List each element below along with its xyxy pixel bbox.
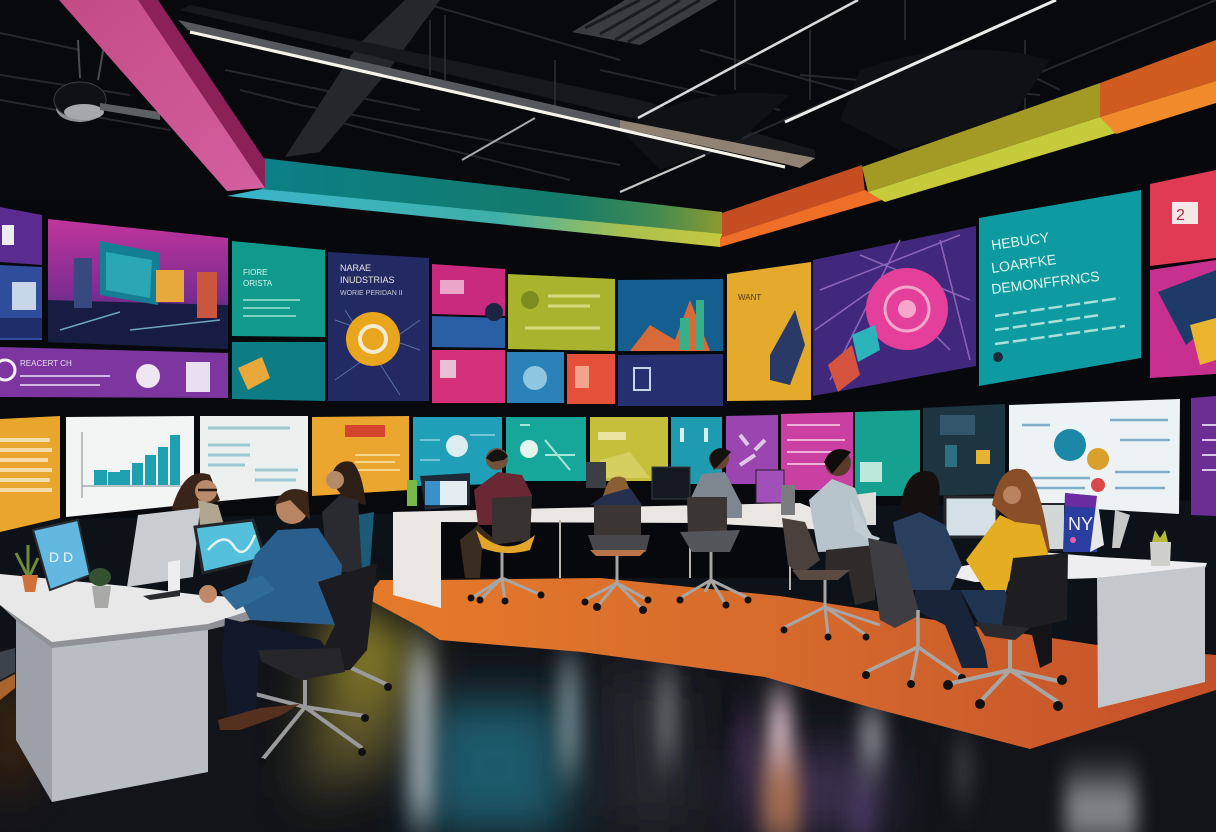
person: woman in navy top [590,476,642,505]
floor strip far left [0,648,15,680]
panel: purple card [726,415,778,484]
panel: bar chart [66,416,194,517]
chair: navy woman [862,538,966,688]
panel: blue edge [0,265,42,340]
laptop: left [420,473,470,510]
woman with glasses at back [172,473,224,528]
front left desk [0,574,283,802]
panel: teal card: ORISTA [243,279,273,288]
panel: purple target artwork [813,226,976,396]
plant: orange pot [16,545,38,592]
orange strip far left [0,674,15,700]
upper wall panels [0,170,1216,406]
arm [220,575,275,610]
panel: navy small card [618,354,723,406]
panel: orange text card [0,416,60,532]
front chair [258,563,377,680]
right desk [930,552,1207,708]
monitor: purple [756,470,784,503]
person: man in maroon shirt [460,448,532,578]
panel: yellow poster [727,262,811,401]
person: man in blue shirt [199,489,342,730]
shoe [218,704,300,730]
panel: teal card right [855,410,920,496]
panel: navy diagram: NARAE [340,263,371,273]
panel: navy diagram: WORIE PERIDAN II [340,290,403,297]
plant: gray pot [89,568,111,608]
hand [199,585,217,603]
floor [0,600,1216,832]
chair: middle center [582,505,652,614]
panel: teal card [232,241,325,337]
band: teal and olive [227,158,722,247]
panel: yellow card [312,416,409,496]
person: woman in navy sweater [893,471,988,668]
chair: middle right [676,497,752,608]
band: yellow [862,83,1116,202]
silver desktop monitor [127,508,200,600]
panel: monitors artwork [48,219,228,349]
panel: teal small card [232,342,325,401]
panel: pink lower card [432,350,505,403]
panel: white diagram card [1009,399,1180,514]
person: woman in yellow top [960,469,1052,668]
pink ceiling beam [59,0,265,191]
floor reflections [0,600,1137,832]
panel: pink card [432,264,505,316]
plants on left desk [16,545,111,608]
band: orange right [1100,40,1216,134]
plant on right desk [1150,530,1171,566]
tablet stand [1112,510,1130,548]
panel: magenta shapes [1150,260,1216,378]
panel: red top right [1150,170,1216,266]
panel: teal card [413,417,502,486]
panel: yellow poster: WANT [738,293,761,302]
display: NY poster [1063,493,1104,552]
panel: orange card [567,354,615,404]
band: orange left [720,165,882,247]
ceiling light: long beam [178,20,815,168]
monitor: back silver [586,462,606,488]
panel: right purple edge [1191,396,1216,516]
panel: navy diagram: INUDSTRIAS [340,275,395,285]
middle desk [393,503,830,608]
chair: white shirt man [780,518,880,640]
orange carpet [366,578,1216,749]
person: man in grey sweater [690,448,742,518]
head [276,492,308,524]
panel: green card [506,417,586,481]
panel: blue card [432,303,505,348]
front chair base [240,665,392,766]
panel: white text card [200,416,308,503]
desk gadget behind right group [853,492,876,525]
laptops on middle desk [407,462,795,515]
lower wall panels [0,396,1216,532]
panel: teal text poster: DEMONFFRNCS [990,268,1100,297]
monitor: center dark [652,467,690,499]
panel: magenta card [781,412,853,490]
shirt [240,528,342,625]
panel: purple strip: REACERT CH [20,359,72,368]
right monitors [945,493,1130,552]
panel: purple strip [0,347,228,398]
panel: purple edge [0,207,42,265]
chair: yellow woman [943,553,1068,711]
panel: teal text poster: HEBUCY [990,229,1051,253]
tablet on stand [33,520,90,590]
panel: teal text poster [979,190,1141,386]
panel: dark media card [923,404,1005,496]
tablet on stand: D D [49,549,73,565]
woman in black jacket [322,461,374,572]
panel: navy diagram [328,252,429,401]
ceiling light: diagonal strips [462,0,1056,192]
teal monitor [195,520,265,573]
panel: red top right: 2 [1176,207,1185,224]
drink and pens [407,480,417,506]
panel: blue chart [618,279,723,351]
panel: blue card [671,417,722,484]
panel: sky card [507,352,564,403]
person: man in white shirt [809,449,880,605]
device: gray speaker [781,485,795,515]
monitor: center white [945,497,997,537]
panel: lime card [508,274,615,351]
panel: teal card: FIORE [243,268,267,277]
monitor: behind yellow woman [1033,504,1065,550]
ceiling spot lamp [54,40,160,122]
panel: lime card [590,417,668,481]
panel: teal text poster: LOARFKE [990,251,1057,276]
chair: middle left [468,496,544,604]
hair [274,489,310,520]
display: NY poster: NY [1068,514,1093,534]
legs [222,618,335,718]
coloured wall bands [227,40,1216,247]
ceiling structure [0,0,1216,192]
